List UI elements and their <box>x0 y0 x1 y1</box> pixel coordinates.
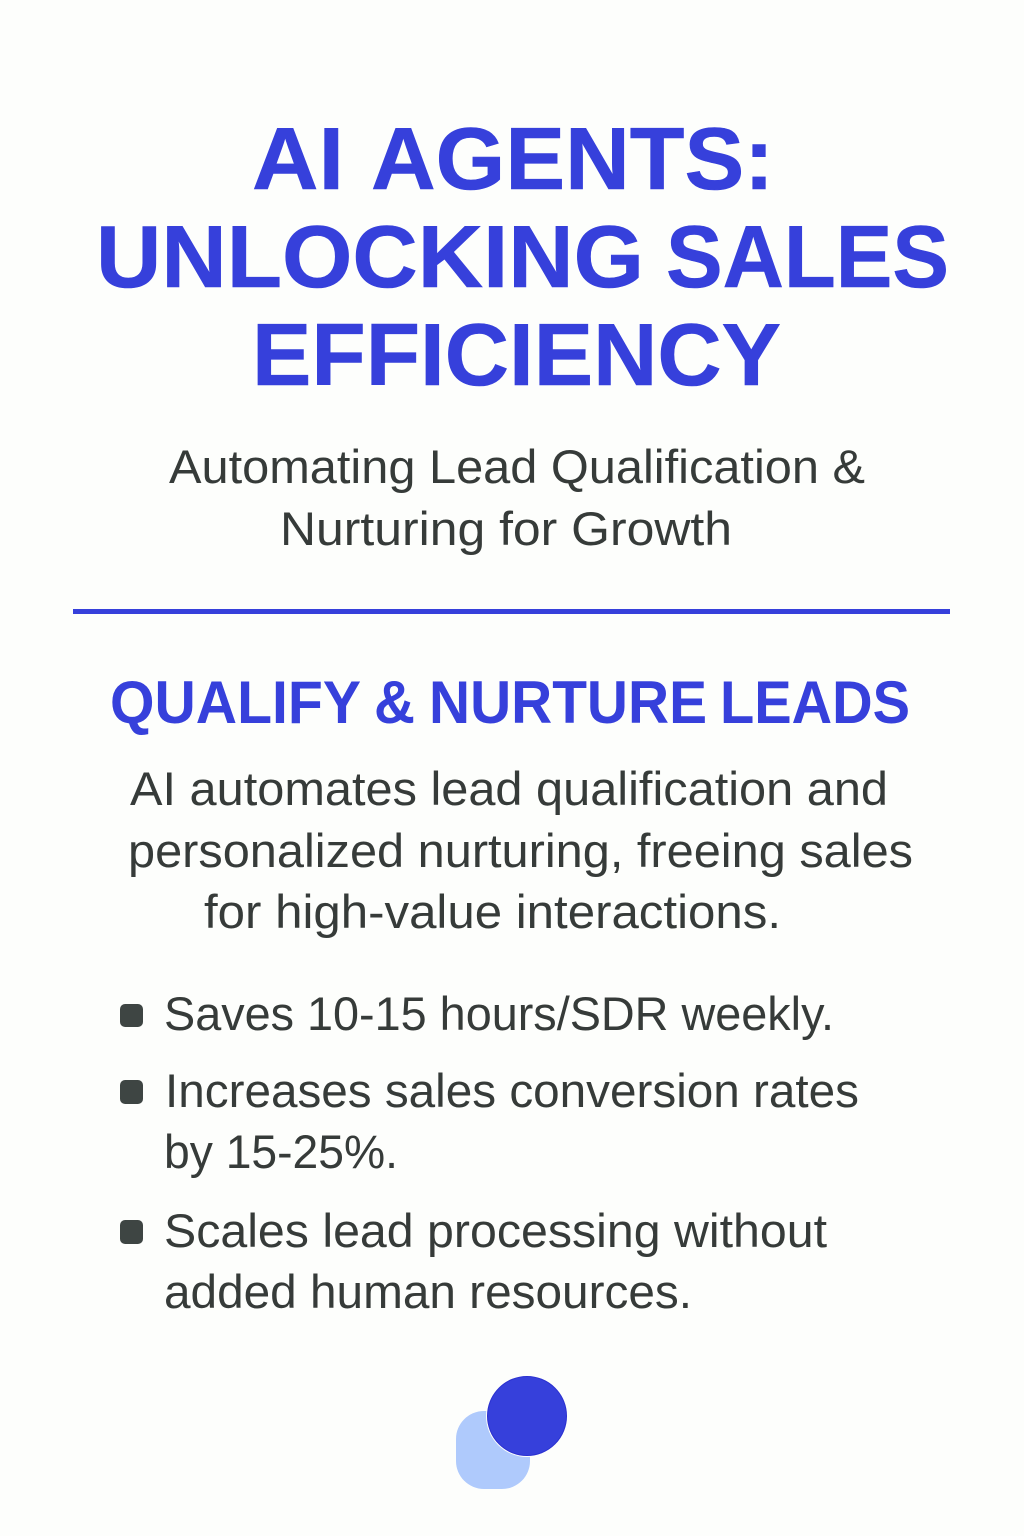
bullet list <box>120 987 859 1318</box>
title: AGENTS: <box>371 109 774 208</box>
bullet 2 <box>120 1064 859 1178</box>
bullet 3: Scales lead processing without <box>164 1204 827 1257</box>
bullet 3: added human resources. <box>164 1265 692 1318</box>
title: UNLOCKING <box>96 207 644 306</box>
description paragraph: AI automates lead qualification and <box>130 762 888 815</box>
title: EFFICIENCY <box>252 305 781 404</box>
divider line <box>73 609 950 614</box>
section heading: NURTURE <box>429 669 707 736</box>
bullet 3 <box>120 1204 827 1318</box>
bullet 1: Saves 10-15 hours/SDR weekly. <box>164 987 834 1040</box>
section heading <box>110 669 910 736</box>
section heading: QUALIFY <box>110 669 361 736</box>
title: SALES <box>666 207 949 306</box>
section heading: LEADS <box>720 669 910 736</box>
section heading: & <box>374 669 415 736</box>
bullet 2: by 15-25%. <box>164 1125 398 1178</box>
subtitle: Nurturing for Growth <box>280 502 732 555</box>
title: AI <box>252 109 344 208</box>
subtitle: Automating Lead Qualification & <box>169 440 865 493</box>
description paragraph: personalized nurturing, freeing sales <box>128 824 913 877</box>
description paragraph: for high-value interactions. <box>204 885 781 938</box>
bullet 2: Increases sales conversion rates <box>165 1064 859 1117</box>
title <box>96 109 949 404</box>
icon: overlapping rounded square and circle <box>456 1375 568 1489</box>
description paragraph <box>128 762 913 938</box>
subtitle <box>169 440 865 555</box>
